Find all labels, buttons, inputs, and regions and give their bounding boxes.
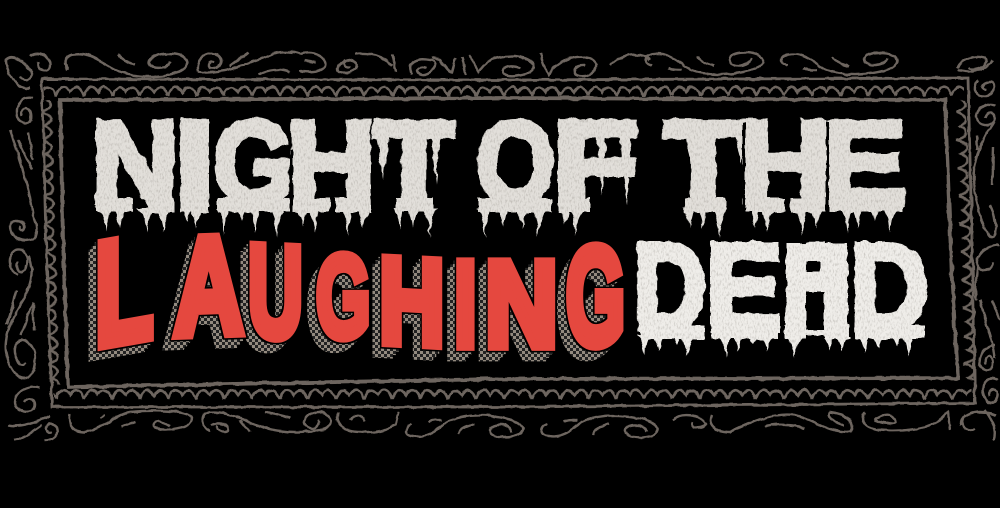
flared letter feet, line one (97, 198, 903, 212)
blocky body of the letter A (786, 243, 848, 335)
letter H: H (379, 232, 445, 372)
title: LAUGHING (95, 205, 625, 378)
letter I: I (454, 237, 477, 373)
title line one letters: E (820, 97, 907, 230)
frame scrollwork: left (6, 98, 40, 412)
frame outer rule (42, 78, 975, 407)
title line one letters: H (286, 97, 376, 230)
title line one letters: O (476, 97, 555, 230)
title line one letters: T (374, 97, 454, 230)
title: DEAD (633, 219, 929, 359)
title line one letters: I (173, 97, 217, 230)
title: NIGHT OF THE (91, 97, 907, 238)
frame scalloped band: bottom (54, 383, 972, 403)
DEAD letters: A (785, 219, 847, 357)
DEAD letters: D (850, 219, 929, 357)
counters and gaps in DEAD (707, 245, 854, 337)
frame scrollwork: bottom (8, 411, 975, 440)
frame inner rule (60, 98, 958, 387)
letter A: A (174, 208, 243, 365)
frame scrollwork: top (6, 52, 898, 88)
frame scalloped band: right (946, 100, 976, 380)
frame scalloped band: left (41, 100, 67, 385)
gaps between letters, line one (175, 115, 829, 213)
DEAD letters: E (705, 219, 783, 357)
hand-drawn ornamental frame (6, 52, 1000, 440)
title line one letters: F (550, 97, 639, 230)
letter U: U (248, 218, 303, 366)
drips under DEAD (636, 335, 917, 359)
DEAD letters: D (633, 219, 707, 357)
flared letter feet, DEAD (640, 325, 925, 339)
letter G: G (316, 233, 370, 362)
title line one letters: N (91, 97, 179, 230)
title line one letters: G (213, 97, 293, 230)
frame scrollwork: right (958, 57, 1000, 440)
frame scalloped band: top (44, 80, 964, 100)
drips under NIGHT OF THE (96, 208, 900, 238)
title line one letters: H (737, 97, 832, 230)
letter N: N (485, 236, 558, 372)
drips inside letters (376, 135, 746, 205)
letter G: G (566, 219, 625, 374)
letter L: L (95, 205, 153, 378)
title line one letters: T (664, 97, 743, 230)
